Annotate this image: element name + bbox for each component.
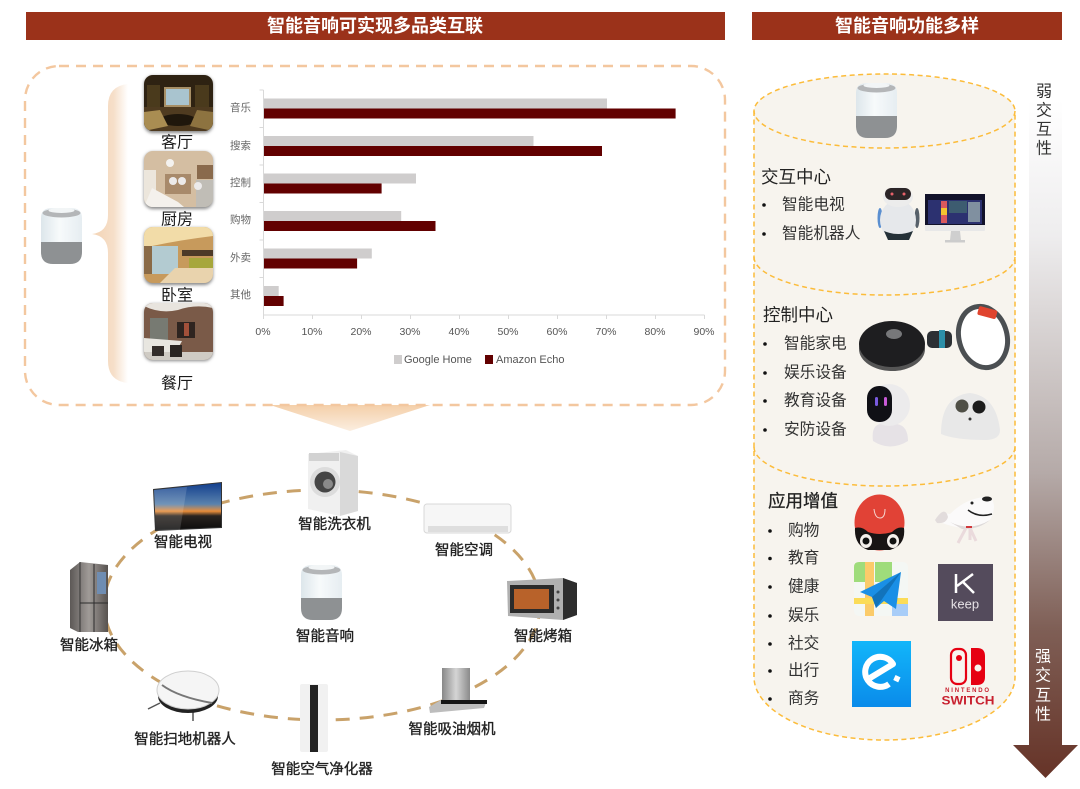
value axis labels: 30% — [399, 326, 421, 338]
value axis labels: 50% — [497, 326, 519, 338]
legend: Google Home — [404, 354, 472, 366]
icon: ring controller — [952, 301, 1014, 373]
text block: interaction centre: 交互中心 — [761, 167, 831, 187]
text block: value-added applications: 商务 — [788, 690, 820, 708]
category labels: 外卖 — [230, 252, 251, 264]
icon: air conditioner — [424, 504, 511, 533]
icon: education robot — [867, 384, 910, 446]
text block: value-added applications: 娱乐 — [788, 606, 820, 624]
value axis labels: 10% — [301, 326, 323, 338]
room photo: living room — [144, 75, 213, 133]
text block: control centre: 教育设备 — [784, 392, 847, 410]
arrow label: weak interactivity: 性 — [1036, 140, 1052, 158]
text block: control centre: 智能家电 — [784, 334, 847, 352]
text block: control centre: 控制中心 — [763, 305, 833, 325]
arrow label: weak interactivity: 弱 — [1036, 82, 1052, 100]
icon: range hood — [429, 668, 487, 713]
room photo: kitchen — [144, 151, 213, 209]
text block: value-added applications: 社交 — [788, 634, 820, 652]
device ring — [104, 490, 540, 720]
icon: black robot vacuum — [859, 321, 925, 371]
icon: smart speaker centre — [301, 565, 342, 620]
text block: value-added applications: 健康 — [788, 578, 820, 596]
legend — [394, 354, 564, 366]
arrow from panel down to device ring — [270, 405, 430, 431]
label: smart speaker: 智能音响 — [296, 628, 354, 645]
value axis labels: 70% — [595, 326, 617, 338]
header: smart speaker functions — [752, 12, 1062, 40]
icon: robot vacuum — [148, 671, 219, 721]
text block: interaction centre: 智能机器人 — [782, 224, 861, 242]
value axis labels: 40% — [448, 326, 470, 338]
bars: Google Home — [264, 98, 607, 296]
label: robot vacuum: 智能扫地机器人 — [134, 731, 236, 748]
arrow label: strong interactivity: 强 — [1035, 648, 1051, 666]
text block: value-added applications — [768, 491, 838, 708]
chart axes — [260, 90, 704, 319]
arrow label: strong interactivity: 性 — [1035, 706, 1051, 724]
arrow label: weak interactivity: 交 — [1036, 102, 1052, 120]
text block: value-added applications: 购物 — [788, 522, 819, 540]
category labels: 控制 — [230, 176, 251, 189]
value axis labels: 0% — [255, 326, 271, 338]
icon: Nintendo Switch logo — [942, 648, 994, 708]
icon: Nintendo Switch logo: SWITCH — [942, 694, 994, 708]
icon: television — [153, 482, 222, 531]
room label: living room: 客厅 — [161, 134, 193, 152]
arrow label: weak interactivity: 互 — [1036, 122, 1052, 138]
value axis labels: 60% — [546, 326, 568, 338]
label: air purifier: 智能空气净化器 — [271, 761, 373, 778]
text block: value-added applications: 出行 — [788, 662, 819, 680]
arrow: weak to strong interactivity — [1013, 82, 1078, 778]
panel: usage scenes dashed frame — [25, 66, 725, 405]
icon: Amap logo — [854, 562, 908, 616]
label: air conditioner: 智能空调 — [435, 542, 493, 559]
room label: bedroom: 卧室 — [161, 286, 193, 304]
text block: control centre: 娱乐设备 — [784, 364, 847, 382]
value axis labels: 80% — [644, 326, 666, 338]
category labels: 音乐 — [230, 101, 251, 114]
arrow label: weak interactivity — [1036, 82, 1052, 158]
category labels: 购物 — [230, 213, 251, 226]
icon: refrigerator — [70, 562, 108, 632]
icon: smart speaker top — [856, 83, 897, 138]
room label: kitchen: 厨房 — [161, 210, 193, 228]
header: smart speaker interconnection — [26, 12, 725, 40]
icon: JD dog logo — [935, 496, 994, 543]
text block: value-added applications: 应用增值 — [768, 491, 838, 511]
label: refrigerator: 智能冰箱 — [60, 637, 118, 654]
label: television: 智能电视 — [154, 534, 212, 551]
arrow label: strong interactivity — [1035, 648, 1051, 724]
icon: Keep logo: keep — [951, 596, 979, 612]
text block: value-added applications: 教育 — [788, 549, 819, 567]
icon: oven — [507, 578, 577, 620]
room label: dining room: 餐厅 — [161, 374, 193, 392]
bar chart: speaker usage — [230, 90, 715, 366]
room photo: dining room — [144, 303, 213, 361]
label: range hood: 智能吸油烟机 — [408, 721, 496, 738]
label: oven: 智能烤箱 — [514, 628, 572, 645]
icon: Keep logo — [938, 564, 993, 621]
value axis labels: 90% — [693, 326, 715, 338]
category labels — [230, 101, 251, 301]
header: smart speaker functions: 智能音响功能多样 — [835, 15, 979, 36]
icon: smart speaker left — [41, 208, 82, 264]
label: washing machine: 智能洗衣机 — [298, 516, 371, 533]
text block: control centre: 安防设备 — [784, 420, 847, 438]
icon: smart monitor — [925, 194, 985, 242]
value axis labels — [255, 326, 715, 338]
arrow label: strong interactivity: 互 — [1035, 688, 1051, 704]
icon: washing machine — [308, 450, 358, 516]
arrow label: strong interactivity: 交 — [1035, 666, 1051, 684]
category labels: 搜索 — [230, 139, 251, 152]
value axis labels: 20% — [350, 326, 372, 338]
icon: Ele.me logo — [852, 641, 911, 707]
legend: Amazon Echo — [496, 354, 564, 366]
text block: interaction centre — [761, 167, 861, 242]
text block: control centre — [763, 305, 847, 438]
room photo: bedroom — [144, 227, 213, 285]
icon: Nintendo Switch logo: NINTENDO — [945, 688, 991, 694]
bars: Amazon Echo — [264, 108, 676, 306]
brace linking speaker to rooms — [92, 84, 128, 383]
panel: function cylinder — [754, 74, 1015, 740]
text block: interaction centre: 智能电视 — [782, 196, 845, 214]
category labels: 其他 — [230, 288, 251, 301]
icon: security camera — [941, 393, 1000, 440]
icon: companion robot — [878, 187, 920, 240]
icon: air purifier — [300, 684, 328, 752]
icon: Tmall logo — [854, 494, 904, 550]
header: smart speaker interconnection: 智能音响可实现多品类互联 — [267, 15, 483, 36]
icon: wrist band controller — [927, 330, 952, 348]
